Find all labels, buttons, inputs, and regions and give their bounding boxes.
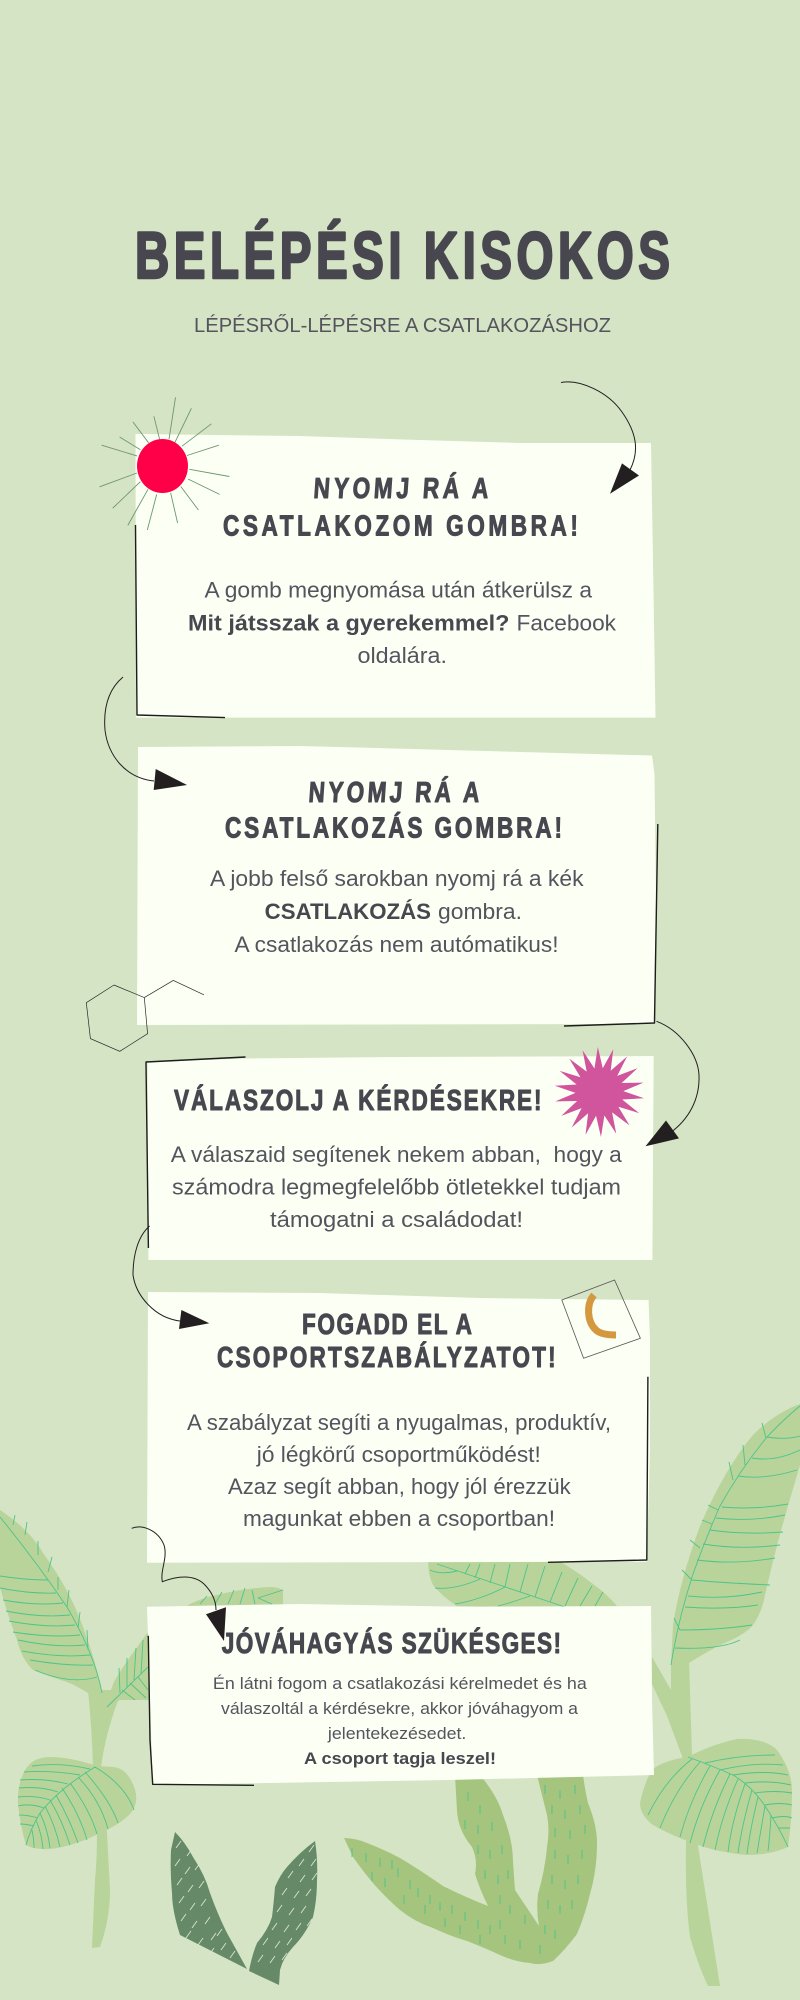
plant: dark green leaves bbox=[171, 1832, 317, 1985]
plant: top middle leaf behind cards bbox=[428, 1560, 617, 1607]
heading: step 1: NYOMJ RÁ A bbox=[313, 471, 490, 505]
text: step 5 body: jelentekezésedet. bbox=[327, 1725, 466, 1743]
text: step 4 body: jó légkörű csoportműködést! bbox=[256, 1442, 541, 1467]
heading: step 2 bbox=[225, 775, 562, 844]
heading: step 4: FOGADD EL A bbox=[302, 1307, 472, 1341]
text: step 1 body: A gomb megnyomása után átkerülsz a bbox=[204, 578, 593, 602]
text: step 1 body bbox=[188, 578, 617, 668]
heading: step 5: JÓVÁHAGYÁS SZÜKÉSGES! bbox=[222, 1626, 561, 1660]
text: step 3 body bbox=[171, 1142, 623, 1232]
heading: step 1 bbox=[223, 471, 578, 542]
heading: step 3: VÁLASZOLJ A KÉRDÉSEKRE! bbox=[174, 1083, 542, 1117]
heading: step 4: CSOPORTSZABÁLYZATOT! bbox=[217, 1340, 556, 1374]
heading: step 4 bbox=[217, 1307, 556, 1374]
icon: pink star burst bbox=[549, 1042, 650, 1142]
text: step 2 body: A csatlakozás nem autómatikus! bbox=[234, 932, 558, 957]
text: step 1 body: Mit játsszak a gyerekemmel? bbox=[188, 610, 510, 636]
plant: right stem with leaves bbox=[640, 1404, 800, 1986]
heading: step 1: CSATLAKOZOM GOMBRA! bbox=[223, 509, 578, 542]
panel: step 3 bbox=[146, 1056, 654, 1260]
text: step 2 body: A jobb felső sarokban nyomj rá a kék bbox=[210, 866, 585, 891]
heading: step 2: CSATLAKOZÁS GOMBRA! bbox=[225, 811, 562, 844]
panel: step 5 bbox=[147, 1604, 654, 1785]
text: step 3 body: A válaszaid segítenek nekem abban, hogy a bbox=[171, 1142, 623, 1167]
panel: step 2 bbox=[137, 746, 658, 1026]
text: step 2 body: gombra. bbox=[438, 899, 522, 924]
text: step 5 body: A csoport tagja leszel! bbox=[304, 1750, 496, 1768]
text: step 5 body: Én látni fogom a csatlakozási kérelmedet és ha bbox=[213, 1674, 588, 1693]
plant: medium green leaf cluster bbox=[344, 1775, 597, 1964]
text: step 4 body: A szabályzat segíti a nyugalmas, produktív, bbox=[187, 1410, 611, 1435]
text: step 1 body: Facebook bbox=[516, 610, 617, 636]
text: step 3 body: támogatni a családodat! bbox=[270, 1207, 523, 1232]
arrow: into step 1 bbox=[561, 382, 639, 494]
arrow: step 2 to step 3 bbox=[646, 1021, 699, 1146]
text: step 5 body bbox=[213, 1674, 588, 1768]
text: step 4 body: Azaz segít abban, hogy jól érezzük bbox=[228, 1474, 572, 1499]
text: step 3 body: számodra legmegfelelőbb ötletekkel tudjam bbox=[172, 1174, 621, 1200]
subtitle: LÉPÉSRŐL-LÉPÉSRE A CSATLAKOZÁSHOZ bbox=[194, 314, 611, 337]
arrow: step 4 to step 5 bbox=[132, 1527, 226, 1641]
text: step 4 body bbox=[187, 1410, 611, 1531]
icon: molecule outline bbox=[86, 980, 204, 1051]
panel: step 4 bbox=[147, 1292, 650, 1563]
title: BELÉPÉSI KISOKOS bbox=[135, 219, 670, 293]
text: step 5 body: válaszoltál a kérdésekre, akkor jóváhagyom a bbox=[221, 1700, 579, 1718]
icon: red sun with rays bbox=[100, 397, 229, 530]
panel: step 1 bbox=[136, 434, 656, 718]
text: step 1 body: oldalára. bbox=[358, 643, 447, 668]
text: step 2 body bbox=[210, 866, 585, 957]
text: step 2 body: CSATLAKOZÁS bbox=[265, 899, 431, 924]
icon: tilted square with orange arc bbox=[562, 1280, 640, 1358]
plant: left stem with leaves bbox=[0, 1510, 283, 1948]
heading: step 2: NYOMJ RÁ A bbox=[308, 775, 481, 809]
text: step 4 body: magunkat ebben a csoportban! bbox=[243, 1506, 555, 1531]
arrow: step 1 to step 2 bbox=[105, 677, 187, 790]
arrow: step 3 to step 4 bbox=[133, 1226, 209, 1329]
